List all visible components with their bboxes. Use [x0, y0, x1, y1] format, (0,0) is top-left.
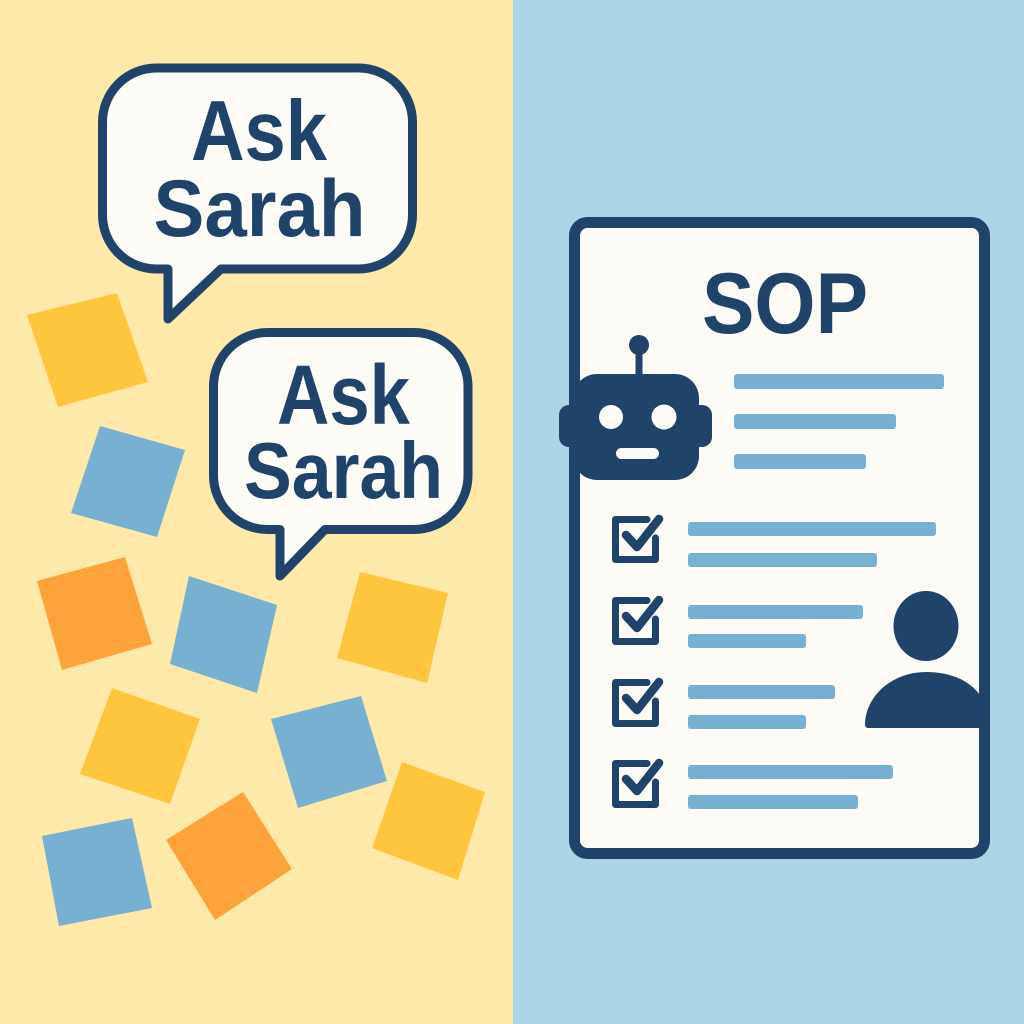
icon: person	[865, 591, 985, 728]
speech bubble: large Ask Sarah	[102, 68, 412, 319]
checklist text lines	[688, 522, 936, 809]
sticky notes scattered	[27, 293, 485, 926]
heading: SOP: SOP	[702, 256, 868, 352]
SOP document	[574, 222, 984, 854]
speech bubble: small Ask Sarah: Ask	[277, 348, 410, 442]
icon: robot	[559, 335, 712, 480]
text lines next to robot	[734, 374, 944, 469]
speech bubble: small Ask Sarah	[214, 332, 468, 576]
speech bubble: large Ask Sarah: Sarah	[154, 164, 366, 254]
speech bubble: small Ask Sarah: Sarah	[244, 426, 443, 515]
panel: yellow left background	[0, 0, 513, 1024]
icon: checkboxes	[616, 519, 659, 804]
panel: blue right background	[513, 0, 1024, 1024]
speech bubble: large Ask Sarah: Ask	[191, 84, 328, 179]
